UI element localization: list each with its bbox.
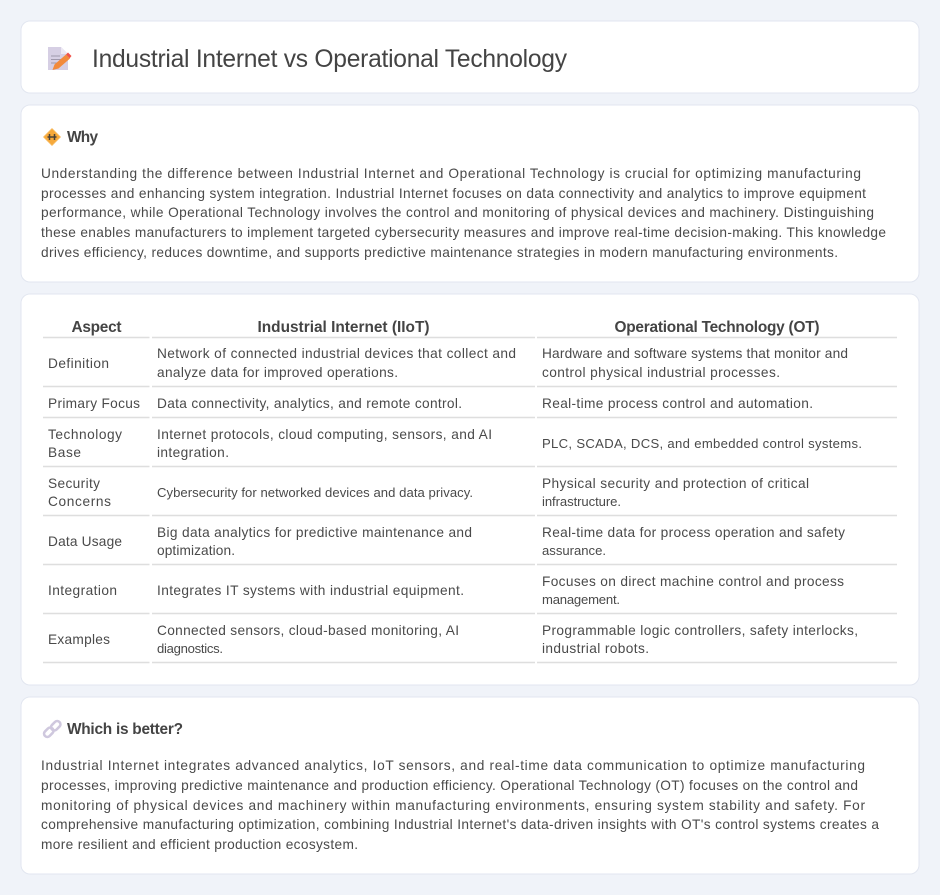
row: integration: Integration bbox=[48, 583, 117, 598]
row: definition: control physical industrial processes. bbox=[542, 365, 780, 380]
panel: why bbox=[21, 105, 919, 282]
row: data usage: optimization. bbox=[157, 543, 235, 558]
row: primary focus: Real-time process control and automation. bbox=[542, 396, 813, 411]
text block: which is better paragraph bbox=[41, 758, 879, 852]
table header: Industrial Internet (IIoT) bbox=[258, 319, 430, 336]
text block: which is better paragraph: more resilient and efficient production ecosystem. bbox=[41, 837, 358, 852]
row: definition: Network of connected industrial devices that collect and bbox=[157, 346, 516, 361]
row: examples: Connected sensors, cloud-based monitoring, AI bbox=[157, 623, 459, 638]
row: examples: Examples bbox=[48, 632, 110, 647]
row: security concerns: Cybersecurity for networked devices and data privacy. bbox=[157, 485, 473, 500]
table header: Operational Technology (OT) bbox=[614, 319, 820, 336]
row: integration bbox=[48, 574, 844, 607]
row: definition bbox=[48, 346, 848, 380]
row: primary focus bbox=[48, 396, 813, 411]
row: technology base: integration. bbox=[157, 445, 229, 460]
text block: why paragraph: processes and enhancing system integration. Industrial Internet focuses on data connectivity and analytics to improve equipment bbox=[41, 186, 866, 201]
row: security concerns: Security bbox=[48, 476, 100, 491]
row: examples: industrial robots. bbox=[542, 641, 649, 656]
row: integration: Focuses on direct machine control and process bbox=[542, 574, 844, 589]
row: data usage bbox=[48, 525, 845, 558]
row: primary focus: Data connectivity, analytics, and remote control. bbox=[157, 396, 462, 411]
heading: why: Why bbox=[67, 129, 98, 146]
row: definition: analyze data for improved operations. bbox=[157, 365, 398, 380]
text block: why paragraph bbox=[41, 166, 886, 260]
text block: why paragraph: Understanding the difference between Industrial Internet and Operational Technology is crucial for optimizing manufacturing bbox=[41, 166, 861, 181]
row: technology base: Internet protocols, cloud computing, sensors, and AI bbox=[157, 427, 492, 442]
panel: comparison table bbox=[21, 294, 919, 685]
text block: which is better paragraph: processes, improving predictive maintenance and production efficiency. Operational Technology (OT) focuses on the control and bbox=[41, 778, 858, 793]
row: data usage: assurance. bbox=[542, 543, 606, 558]
row: security concerns: Concerns bbox=[48, 494, 111, 509]
title: Industrial Internet vs Operational Technology bbox=[92, 46, 568, 73]
text block: which is better paragraph: monitoring of physical devices and machinery within manufacturing environments, ensuring system stability and safety. For bbox=[41, 798, 865, 813]
text block: why paragraph: these enables manufacturers to implement targeted cybersecurity measures and improve real-time decision-making. This knowledge bbox=[41, 225, 886, 240]
table header: Aspect bbox=[72, 319, 122, 336]
row: data usage: Big data analytics for predictive maintenance and bbox=[157, 525, 472, 540]
row: integration: management. bbox=[542, 592, 620, 607]
icon: warning diamond bbox=[44, 128, 60, 146]
icon: chain link bbox=[43, 720, 62, 738]
row: security concerns bbox=[48, 476, 809, 509]
table header bbox=[72, 319, 820, 336]
text block: why paragraph: performance, while Operational Technology involves the control and monitoring of physical devices and machinery. Distinguishing bbox=[41, 205, 874, 220]
row: technology base: PLC, SCADA, DCS, and embedded control systems. bbox=[542, 436, 862, 451]
row: examples: diagnostics. bbox=[157, 641, 223, 656]
row: data usage: Real-time data for process operation and safety bbox=[542, 525, 845, 540]
text block: which is better paragraph: comprehensive manufacturing optimization, combining Industrial Internet's data-driven insights with OT's control systems creates a bbox=[41, 817, 879, 832]
panel: which is better bbox=[21, 697, 919, 874]
text block: which is better paragraph: Industrial Internet integrates advanced analytics, IoT sensors, and real-time data communication to optimize manufacturing bbox=[41, 758, 865, 773]
row: examples bbox=[48, 623, 858, 656]
row: technology base bbox=[48, 427, 862, 460]
row: security concerns: infrastructure. bbox=[542, 494, 621, 509]
heading: which is better: Which is better? bbox=[67, 721, 183, 738]
row: data usage: Data Usage bbox=[48, 534, 122, 549]
row: security concerns: Physical security and protection of critical bbox=[542, 476, 809, 491]
text block: why paragraph: drives efficiency, reduces downtime, and supports predictive maintenance strategies in modern manufacturing environments. bbox=[41, 245, 838, 260]
row: definition: Hardware and software systems that monitor and bbox=[542, 346, 848, 361]
row: technology base: Technology bbox=[48, 427, 122, 442]
row: definition: Definition bbox=[48, 356, 109, 371]
row: primary focus: Primary Focus bbox=[48, 396, 140, 411]
row: integration: Integrates IT systems with industrial equipment. bbox=[157, 583, 464, 598]
row: technology base: Base bbox=[48, 445, 81, 460]
icon: document with pencil bbox=[48, 47, 72, 70]
panel: header bbox=[21, 21, 919, 93]
row: examples: Programmable logic controllers, safety interlocks, bbox=[542, 623, 858, 638]
